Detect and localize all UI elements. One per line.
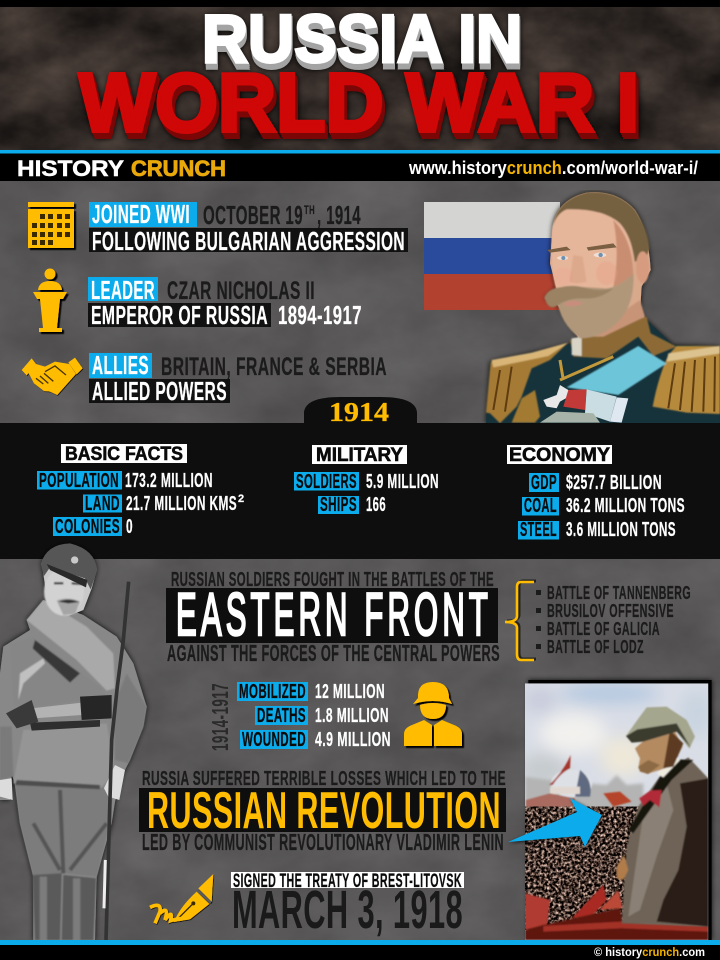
logo: History Crunch: HISTORY <box>17 156 124 181</box>
fact: leader: CZAR NICHOLAS II <box>167 277 315 305</box>
column: military <box>294 445 439 516</box>
date: MARCH 3, 1918 <box>232 880 463 940</box>
casualties stats: WOUNDED <box>242 729 306 751</box>
battles list: BATTLE OF LODZ <box>547 637 644 657</box>
portrait: Czar Nicholas II <box>486 192 720 423</box>
column: economy: COAL <box>524 495 557 517</box>
arrow <box>508 798 602 847</box>
fact: joined WWI: FOLLOWING BULGARIAN AGGRESSION <box>92 226 405 256</box>
fact: joined WWI: , 1914 <box>317 200 361 230</box>
Eastern Front block: RUSSIAN SOLDIERS FOUGHT IN THE BATTLES OF THE <box>171 569 494 591</box>
fact: leader: EMPEROR OF RUSSIA <box>91 300 268 330</box>
trousers <box>15 783 113 877</box>
column: basic facts <box>37 444 245 538</box>
head <box>44 568 84 616</box>
footer <box>0 940 720 960</box>
column: economy: $257.7 BILLION <box>566 472 662 494</box>
column: economy: STEEL <box>520 519 557 541</box>
neck <box>587 300 645 337</box>
column: military: SOLDIERS <box>296 471 357 493</box>
year tab: 1914 <box>329 397 389 427</box>
skyline <box>525 775 643 810</box>
casualties stats: MOBILIZED <box>239 681 306 703</box>
red bow <box>639 790 662 807</box>
ear <box>636 251 649 283</box>
hand <box>617 855 628 880</box>
Russian flag <box>424 202 560 310</box>
fact: allies <box>89 350 387 406</box>
title line: Russia in: RUSSIA IN <box>202 1 522 77</box>
treaty signing: SIGNED THE TREATY OF BREST-LITOVSK <box>233 871 462 892</box>
strap <box>33 640 80 683</box>
rifle <box>106 582 129 940</box>
uniform epaulettes <box>486 343 720 423</box>
moustache <box>544 286 613 307</box>
Lenin figure <box>617 707 708 927</box>
casualties stats: 12 MILLION <box>315 681 385 703</box>
icon: handshake <box>22 358 83 395</box>
fact: allies: ALLIES <box>92 350 149 380</box>
column: basic facts: 173.2 MILLION <box>125 470 213 492</box>
hands <box>0 765 125 800</box>
coat <box>622 757 708 927</box>
beard <box>557 273 633 338</box>
medals <box>540 385 628 423</box>
column: basic facts: 2 <box>238 493 245 505</box>
chest <box>33 642 77 680</box>
blue sash <box>567 346 667 395</box>
header banner <box>0 0 720 151</box>
logo: History Crunch <box>17 156 226 181</box>
tribune rail <box>525 908 708 940</box>
column: military: 166 <box>366 494 386 516</box>
cap <box>41 543 97 589</box>
face <box>635 728 683 774</box>
column: economy: GDP <box>531 472 557 494</box>
crowd <box>525 807 640 930</box>
brand bar <box>0 150 720 181</box>
fact: leader: 1894-1917 <box>278 300 362 330</box>
rolled blanket <box>27 600 115 691</box>
fact: joined WWI: JOINED WWI <box>92 199 190 229</box>
credit: © historycrunch.com <box>594 947 705 959</box>
column: military: 5.9 MILLION <box>366 471 439 493</box>
fact: allies: BRITAIN, FRANCE & SERBIA <box>161 353 387 381</box>
casualties stats: DEATHS <box>257 705 306 727</box>
fact: allies: ALLIED POWERS <box>92 376 227 406</box>
fact: leader <box>88 275 362 330</box>
hair <box>553 192 649 262</box>
column: basic facts: 0 <box>126 516 133 538</box>
title line: World War I: WORLD WAR I <box>79 56 639 149</box>
sky <box>525 683 708 940</box>
Eastern Front block <box>166 569 500 666</box>
column: basic facts: POPULATION <box>39 470 119 492</box>
brace <box>505 581 536 660</box>
year tab <box>304 397 417 427</box>
column: basic facts: 21.7 MILLION KMS <box>126 493 237 515</box>
epaulette fringe <box>493 357 715 412</box>
Russian Revolution block <box>139 768 506 855</box>
coat skirt <box>13 723 115 788</box>
belt and holsters <box>6 695 112 731</box>
treaty signing <box>231 871 464 940</box>
photo: Russian soldier <box>0 543 147 940</box>
fact: joined WWI: OCTOBER 19 <box>203 200 303 230</box>
icon: podium <box>33 268 67 332</box>
website url: www.historycrunch.com/world-war-i/ <box>408 158 698 178</box>
icon: calendar <box>28 202 74 248</box>
collar <box>657 757 680 777</box>
battles list <box>536 583 691 657</box>
red banners <box>525 885 623 930</box>
column: military: SHIPS <box>320 494 357 516</box>
fact: joined WWI: TH <box>304 203 315 217</box>
gold collar <box>570 317 677 358</box>
painting: Lenin <box>520 680 713 940</box>
casualties stats <box>207 681 391 751</box>
icon: fountain pen <box>150 874 213 923</box>
column: basic facts: BASIC FACTS <box>65 444 183 465</box>
cap <box>626 707 695 749</box>
rotated years: 1914-1917 <box>207 683 233 751</box>
casualties stats: 1.8 MILLION <box>315 705 389 727</box>
sleeves <box>0 673 147 780</box>
column: basic facts: LAND <box>85 493 120 515</box>
logo: History Crunch: CRUNCH <box>131 156 226 181</box>
column: basic facts: COLONIES <box>55 516 120 538</box>
casualties stats: 4.9 MILLION <box>315 729 391 751</box>
icon: soldier <box>404 682 462 746</box>
page background <box>0 181 720 941</box>
fact: joined WWI <box>89 199 408 256</box>
column: military: MILITARY <box>316 445 403 466</box>
column: economy <box>507 445 685 541</box>
stats band <box>0 397 720 559</box>
eyes and brows <box>547 243 617 260</box>
globe monument <box>525 754 592 806</box>
boots <box>33 873 96 940</box>
fact: leader: LEADER <box>91 275 155 305</box>
face <box>551 205 633 300</box>
column: economy: ECONOMY <box>509 445 610 466</box>
